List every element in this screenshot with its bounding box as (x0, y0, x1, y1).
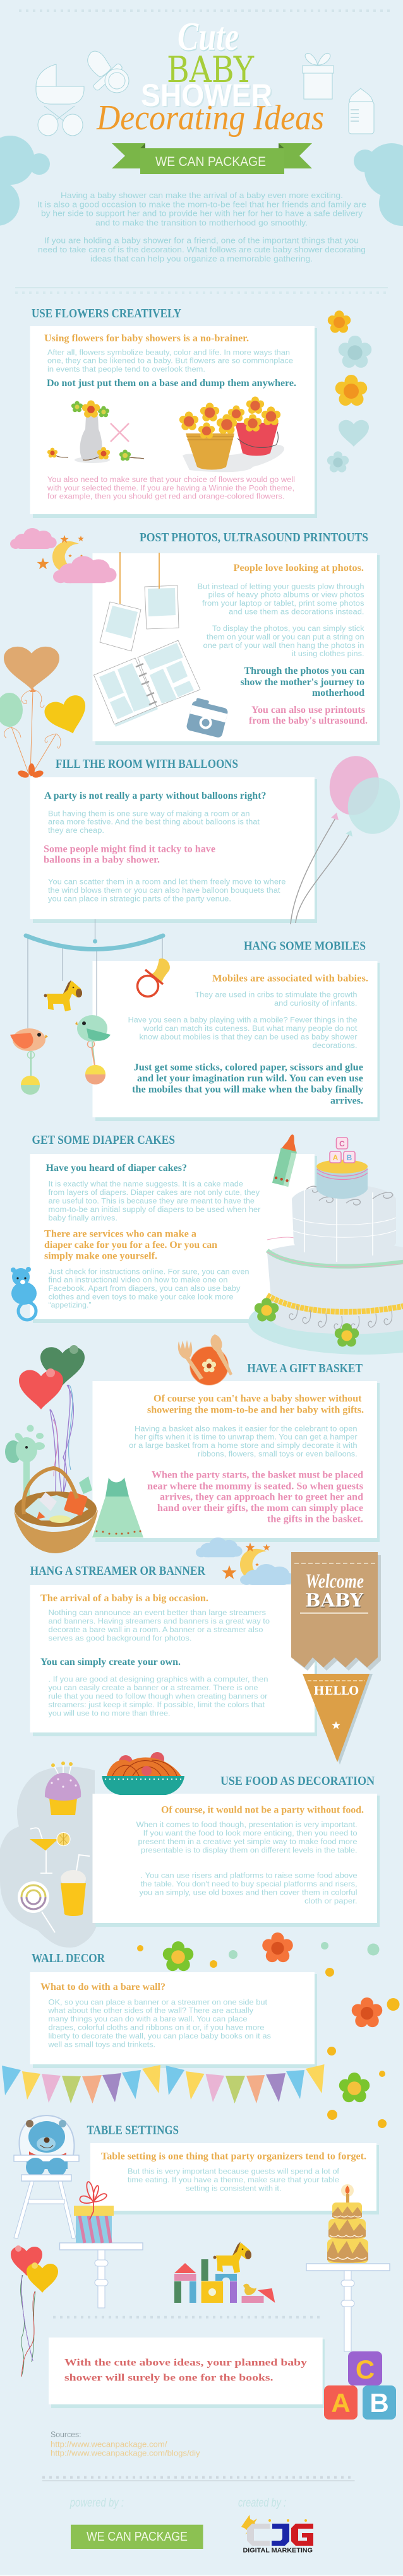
text: food body: presentable is to display them on different levels in the table. (141, 1847, 358, 1855)
illustration: flower buckets (179, 396, 284, 472)
callout: when the party starts: near where the mommy is seated. So when guests (147, 1481, 363, 1491)
text: diaper cakes body 1 (48, 1181, 261, 1223)
title: Decorating Ideas (96, 98, 324, 138)
callout: sticks and paper: Just get some sticks, colored paper, scissors and glue (134, 1062, 363, 1073)
icon: blue clouds and moon (196, 1538, 295, 1585)
text: balloons body 1: But having them is one sure way of making a room or an (48, 810, 250, 818)
text: streamer body 2 (48, 1676, 268, 1717)
panel: streamer card (30, 1585, 317, 1736)
bottom divider (42, 2476, 355, 2479)
text: mobiles body: decorations. (312, 1042, 358, 1050)
callout: sticks and paper: and let your imagination run wild. You can even use (137, 1073, 363, 1084)
banner: hello pennant (303, 1666, 373, 1765)
heading: post photos: POST PHOTOS, ULTRASOUND PRINTOUTS (140, 531, 368, 544)
bottom edge (0, 2575, 403, 2576)
illustration: diaper cake: B (347, 1153, 352, 1162)
banner: welcome baby (291, 1552, 381, 1671)
text: streamer body 2: streamers: just keep it simple. If possible, limit the colors that (48, 1702, 265, 1709)
heading: wall decor: WALL DECOR (32, 1951, 105, 1965)
icon: baby bottle outline (349, 88, 374, 134)
title: BABY (167, 49, 255, 91)
text: diaper cakes body 2: clothes and even toys to make your cake look more (48, 1293, 234, 1301)
callout: sticks and paper: arrives. (330, 1095, 363, 1106)
text: flowers body (47, 349, 293, 373)
text: streamer body 2: . If you are good at designing graphics with a computer, then (48, 1676, 268, 1684)
intro text: Having a baby shower can make the arrival of a baby even more exciting. (61, 191, 343, 200)
heading: balloons: FILL THE ROOM WITH BALLOONS (56, 757, 238, 771)
text: balloons body 2: you can place in strategic parts of the party venue. (48, 896, 231, 903)
subheading: gift basket: Of course you can't have a baby shower without (153, 1394, 362, 1404)
illustration: diaper cake: A (333, 1153, 339, 1162)
text: balloons body 2: the wind blows them or you can also have balloon bouquets that (48, 887, 280, 895)
text: mobiles body (128, 992, 358, 1050)
banner: welcome baby: Welcome (305, 1570, 364, 1592)
panel: conclusion: shower will surely be one for the books. (64, 2372, 274, 2383)
icon: ABC blocks (324, 2351, 396, 2420)
subheading: food: Of course, it would not be a party without food. (161, 1804, 364, 1815)
heading: diaper cakes: GET SOME DIAPER CAKES (32, 1133, 175, 1147)
text: wall decor body: many things you can do with a bare wall. You can place (48, 2016, 248, 2023)
subheading: balloons: A party is not really a party without balloons right? (44, 791, 267, 801)
icon: spaghetti bowl (102, 1752, 184, 1795)
panel: gift basket card (92, 1381, 380, 1542)
subheading: table settings: Table setting is one thing that party organizers tend to forget. (101, 2151, 366, 2162)
callout: tacky: balloons in a baby shower. (44, 855, 160, 866)
text: gift basket body (129, 1425, 358, 1459)
illustration: high chair with teddy (14, 2115, 79, 2238)
callout: ultrasound: from the baby's ultrasound. (249, 715, 368, 726)
text: streamer body 1: and banners. Having streamers and banners is a great way to (48, 1618, 270, 1625)
section: post photos (10, 528, 380, 745)
callout: when the party starts (147, 1470, 363, 1525)
heading: mobiles: HANG SOME MOBILES (244, 939, 366, 953)
callout: tacky: Some people might find it tacky to have (44, 844, 215, 855)
callout: services: simply make one yourself. (44, 1251, 157, 1262)
icon: cocktail (30, 1828, 70, 1873)
text: food body (136, 1821, 358, 1905)
illustration: gift basket and balloons (5, 1345, 98, 1553)
icon: plate with fork and spoon (178, 1334, 232, 1385)
callout: services (44, 1229, 217, 1262)
text: balloons body 1: area more festive. And the best thing about balloons is that (48, 819, 260, 826)
icon: lollipop (18, 1881, 55, 1932)
title (96, 14, 324, 138)
icon: green dress (92, 1478, 143, 1538)
callout: services: There are services who can make a (44, 1229, 196, 1240)
subheading: gift basket (147, 1394, 364, 1415)
icon: teddy rattle (11, 1267, 37, 1320)
text: table settings body (128, 2168, 340, 2193)
callout: ultrasound: You can also use printouts (251, 705, 365, 715)
section: streamer or banner (30, 1538, 381, 1765)
callout: sticks and paper (132, 1062, 363, 1106)
intro text: It is also a good occasion to make the mom-to-be feel that her friends and family are (37, 199, 366, 209)
text: diaper cakes body 2 (48, 1268, 249, 1310)
text: streamer body 1: serves as good background for photos. (48, 1635, 192, 1643)
text: photos body: from your laptop or tablet, print some photos (202, 600, 364, 608)
heading: table settings: TABLE SETTINGS (87, 2124, 179, 2138)
title: Cute (178, 15, 239, 60)
section: gift basket (5, 1334, 380, 1553)
text: table settings body: setting is consistent with it. (186, 2185, 282, 2193)
callout: mother's journey: show the mother's journey to (240, 677, 364, 688)
icon: ABC blocks: A (331, 2388, 351, 2418)
heading: use flowers: USE FLOWERS CREATIVELY (32, 307, 181, 321)
sources: Sources: (51, 2430, 81, 2439)
text: wall decor body: OK, so you can place a banner or a streamer on one side but (48, 1999, 268, 2006)
text: streamer body 1: Nothing can announce an event better than large streamers (48, 1609, 266, 1617)
callout: when the party starts: hand over their gifts, the mom can simply place (157, 1503, 363, 1514)
text: balloons body 1: they are cheap. (48, 827, 104, 835)
footer: powered by: powered by : (69, 2497, 124, 2510)
illustration: heart balloons (11, 2245, 58, 2377)
text: photos body (197, 583, 364, 658)
text: diaper cakes body 2: find an instructional video on how to make one on (48, 1277, 227, 1285)
panel: conclusion (49, 2338, 325, 2408)
shape: grey backdrop blob (0, 1767, 100, 1948)
footer: created by: created by : (238, 2497, 286, 2510)
callout: when the party starts: arrives, they can approach her to greet her and (160, 1492, 363, 1503)
text: balloons body 2 (48, 879, 286, 903)
intro text: ideas that can help you organize a memorable gathering. (90, 254, 313, 263)
callout: tacky (44, 844, 215, 866)
panel: table settings card (90, 2143, 379, 2214)
text: wall decor body: what about the other sides of the wall? There are actually (47, 2008, 253, 2015)
subheading: photos: People love looking at photos. (234, 563, 364, 573)
icon: camera (186, 697, 229, 738)
panel: conclusion: With the cute above ideas, your planned baby (64, 2357, 307, 2368)
text: photos body: To display the photos, you can simply stick (212, 625, 364, 633)
text: flowers body: one, they can be likened to a baby. But flowers are so commonplace (47, 358, 293, 365)
text: mobiles body: and curiosity of infants. (274, 1000, 358, 1008)
footer: powered by (69, 2497, 203, 2549)
subheading: gift basket: showering the mom-to-be and her baby with gifts. (147, 1404, 364, 1415)
callout: mother's journey: Through the photos you can (244, 666, 364, 676)
subheading: no-brainer: Using flowers for baby showers is a no-brainer. (44, 333, 249, 344)
icon: milkshake (61, 1855, 90, 1916)
panel: diaper cakes card (30, 1154, 317, 1323)
text: food body: When it comes to food though, presentation is very important. (136, 1821, 358, 1829)
text: balloons body 2: You can scatter them in a room and let them freely move to where (48, 879, 286, 886)
ribbon: WE CAN PACKAGE (112, 143, 312, 174)
intro text (37, 191, 366, 263)
subheading: wall decor: What to do with a bare wall? (40, 1982, 165, 1992)
callout: services: diaper cake for you for a fee. Or you can (44, 1240, 217, 1250)
text: streamer body 1: decorate a bare wall in a room. A banner or a streamer also (48, 1626, 263, 1634)
bunting (2, 2064, 325, 2103)
illustration: toy blocks (174, 2242, 275, 2303)
illustration: hanging photos (100, 552, 179, 651)
icon: cupcake (45, 1761, 81, 1815)
callout: when the party starts: When the party starts, the basket must be placed (152, 1470, 363, 1481)
text: food body: . You can use risers and platforms to raise some food above (141, 1873, 358, 1880)
panel: mobiles card (92, 961, 380, 1121)
text: diaper cakes body 1: It is exactly what the name suggests. It is a cake made (48, 1181, 243, 1189)
illustration: hanging mobile (10, 919, 170, 1095)
text: diaper cakes body 1: mom-to-be an initial supply of diapers to be used when her (48, 1206, 261, 1214)
sources (51, 2430, 200, 2458)
title: SHOWER (141, 78, 272, 113)
text: diaper cakes body 2: Facebook. Apart from diapers, you can also use baby (48, 1285, 241, 1293)
callout: do not dump: Do not just put them on a base and dump them anywhere. (47, 378, 296, 389)
text: gift basket body: ribbons, flowers, small toys or even balloons. (198, 1451, 358, 1459)
subheading: diaper cakes: Have you heard of diaper cakes? (45, 1163, 187, 1173)
icon: gift outline (303, 53, 334, 99)
callout: mother's journey (240, 666, 364, 698)
illustration: photo album (93, 640, 200, 727)
text: photos body: and use them as decorations instead. (229, 608, 364, 616)
title: SHOWER (142, 79, 274, 114)
illustration: diaper cake (248, 1138, 403, 1355)
text: gift basket body: her gifts when it is time to unwrap them. You can get a hamper (135, 1434, 358, 1442)
intro text: and to make the transition to motherhood go smoothly. (95, 218, 308, 227)
text: wall decor body: well as small toys and trinkets. (47, 2042, 155, 2049)
banner: welcome baby: BABY (306, 1591, 364, 1612)
section: table settings (11, 2115, 390, 2377)
dotted divider (53, 2316, 323, 2319)
heading: streamer: HANG A STREAMER OR BANNER (30, 1564, 205, 1578)
text: flowers body: After all, flowers symbolize beauty, color and life. In more ways than (47, 349, 290, 356)
panel: balloons card (30, 777, 317, 923)
icon: ABC blocks: C (356, 2355, 375, 2384)
text: photos body: one part of your wall then hang the photos in (203, 642, 364, 650)
illustration: tiered cake on table (306, 2184, 390, 2351)
text: food body: the table. You don't need to buy special platforms and risers, (141, 1881, 358, 1888)
callout: when the party starts: the gifts in the basket. (267, 1514, 363, 1525)
title: Cute (177, 14, 239, 59)
text: mobiles body: Have you seen a baby playing with a mobile? Fewer things in the (128, 1017, 358, 1025)
text: food body: cloth or paper. (304, 1898, 358, 1905)
intro divider (15, 287, 388, 288)
text: photos body: But instead of letting your guests plow through (197, 583, 364, 591)
section: use flowers creatively (30, 307, 371, 518)
intro text: need to take care of is the decoration. What follows are cute baby shower decorating (38, 245, 366, 254)
panel: photos card (92, 553, 380, 745)
text: table settings body: time eating. If you have a theme, make sure that your table (128, 2177, 339, 2184)
sources: http://www.wecanpackage.com/ (51, 2439, 167, 2449)
subheading: create your own: You can simply create your own. (40, 1657, 181, 1667)
illustration: diaper cake: C (339, 1139, 345, 1148)
footer: powered by: WE CAN PACKAGE (87, 2530, 188, 2544)
text: wall decor body (47, 1999, 271, 2049)
section: mobiles (10, 919, 380, 1121)
text: diaper cakes body 1: baby finally arrives. (48, 1215, 117, 1223)
text: diaper cakes body 2: “appetizing.” (48, 1302, 92, 1310)
footer: created by (238, 2497, 313, 2555)
text: streamer body 2: rule that you need to follow though when creating banners or (48, 1693, 268, 1701)
section: food as decoration (0, 1752, 380, 1948)
intro text: by her side to support her and to provide her with her for her to have a safe delivery (41, 209, 363, 218)
banner: hello pennant: HELLO (313, 1684, 359, 1698)
text: photos body: them on your wall or you can put a string on (207, 633, 364, 641)
text: wall decor body: liberty to decorate the wall, you can place baby books on it as (48, 2033, 271, 2040)
text: mobiles body: world can match its cuteness. But what many people do not (143, 1025, 358, 1033)
top dotted divider (19, 9, 393, 12)
text: diaper cakes body 2: Just check for instructions online. For sure, you can even (48, 1268, 249, 1276)
heading: gift basket: HAVE A GIFT BASKET (247, 1362, 363, 1375)
ribbon: WE CAN PACKAGE: WE CAN PACKAGE (155, 155, 266, 169)
text: flowers body: in events that people tend to overlook them. (47, 366, 205, 373)
text: wall decor body: drapes, colorful cloths and ribbons on it or, if you have more (48, 2025, 264, 2032)
callout: sticks and paper: the mobiles that you will make when the baby finally (132, 1085, 363, 1095)
subheading: mobiles: Mobiles are associated with babies. (212, 973, 368, 984)
sources: http://www.wecanpackage.com/blogs/diy (51, 2449, 200, 2458)
illustration: left heart balloons (0, 647, 93, 779)
text: food body: present them in a creative yet simple way to make food more (138, 1838, 358, 1846)
text: flowers pink note: You also need to make sure that your choice of flowers would go well (47, 476, 295, 484)
text: photos body: piles of heavy photo albums or view photos (208, 592, 364, 599)
text: flowers pink note: for example, then you should get red and orange-colored flowers. (47, 493, 284, 501)
text: gift basket body: Having a basket also makes it easier for the celebrant to open (135, 1425, 358, 1433)
logo: CJG: DIGITAL MARKETING (243, 2548, 313, 2555)
icon: pacifier outline (88, 51, 129, 93)
icon: side flowers (327, 310, 371, 473)
heading: food: USE FOOD AS DECORATION (220, 1774, 375, 1788)
panel: food card (92, 1794, 380, 1927)
text: flowers pink note: with your selected theme. If you are having a Winnie the Pooh theme, (47, 485, 294, 492)
text: photos body: it using clothes pins. (292, 650, 364, 658)
icon: scattered flowers and dots (137, 1932, 399, 2128)
section: diaper cakes (11, 1132, 403, 1355)
text: mobiles body: know about mobiles is that they can be used as baby shower (139, 1033, 358, 1041)
text: table settings body: But this is very important because guests will spend a lot of (128, 2168, 340, 2176)
text: streamer body 2: you can easily create a banner or a streamer. There is one (48, 1685, 258, 1692)
text: food body: If you want the food to look more enticing, then you need to (143, 1830, 358, 1837)
icon: ABC blocks: B (370, 2388, 389, 2418)
illustration: vase with cross (47, 400, 144, 463)
text: diaper cakes body 1: from layers of diapers. Diaper cakes are not only cute, they (48, 1189, 260, 1197)
illustration: gift on side table (59, 2182, 143, 2308)
icon: stroller outline (36, 64, 84, 136)
panel: flowers card (30, 326, 317, 518)
intro text: If you are holding a baby shower for a friend, one of the important things that you (44, 236, 359, 245)
text: streamer body 2: you will use to no more than three. (48, 1710, 171, 1717)
section: balloons (0, 647, 403, 924)
text: streamer body 1 (48, 1609, 270, 1643)
text: mobiles body: They are used in cribs to stimulate the growth (195, 992, 358, 999)
callout: ultrasound (249, 705, 368, 726)
text: food body: you an simply, use old boxes and then cover them in colorful (139, 1889, 358, 1897)
panel: wall decor card (30, 1972, 317, 2068)
subheading: streamer: The arrival of a baby is a big occasion. (40, 1593, 208, 1604)
illustration: right balloons (291, 752, 403, 924)
text: balloons body 1 (48, 810, 260, 835)
text: flowers pink note (47, 476, 295, 501)
section: wall decor (2, 1932, 399, 2128)
text: gift basket body: or a large basket from a home store and simply decorate it with (129, 1442, 358, 1450)
decorative bubbles (0, 136, 403, 226)
text: diaper cakes body 1: are useful too. This is because they are meant to have the (48, 1197, 255, 1205)
icon: clouds and moon (10, 528, 116, 583)
icon: green bottle (272, 1132, 301, 1187)
banner: welcome baby: BABY (305, 1590, 363, 1611)
callout: mother's journey: motherhood (312, 688, 364, 698)
